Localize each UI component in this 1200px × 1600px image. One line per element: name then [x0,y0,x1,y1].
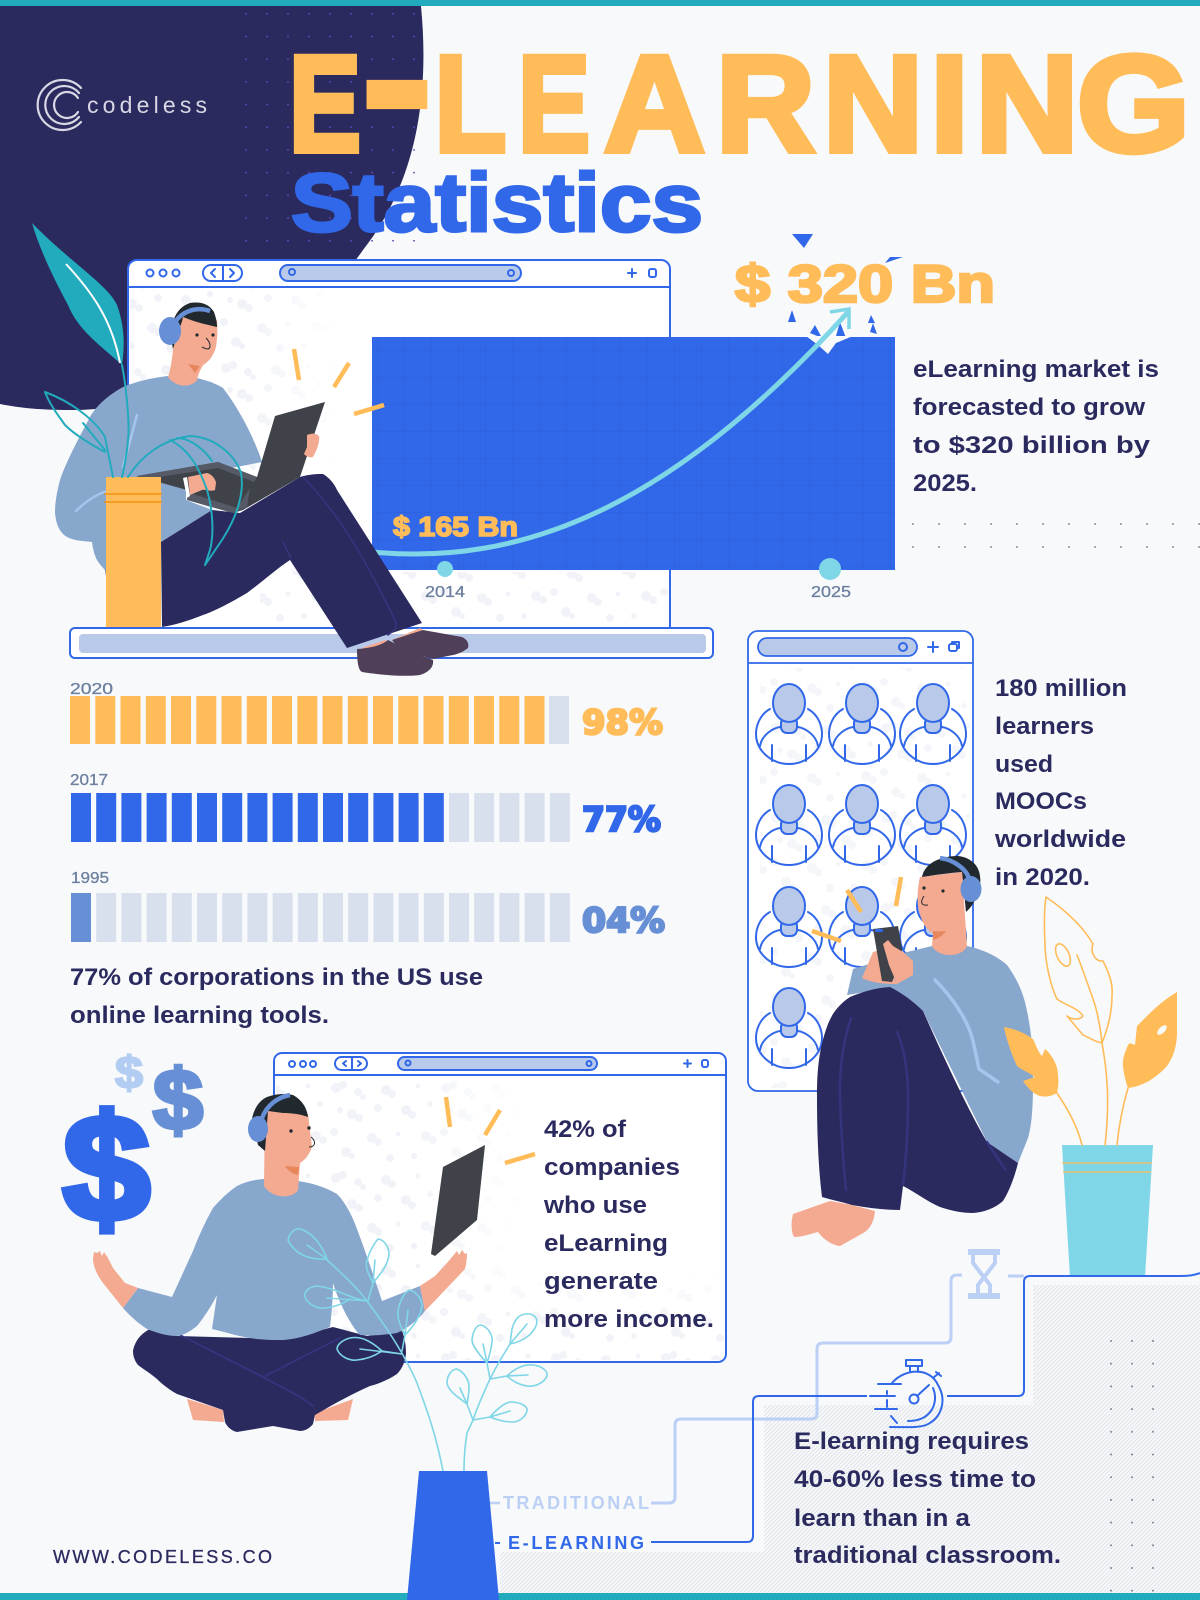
pants seams [840,1018,1005,1190]
plant: orange leaves [1004,897,1177,1145]
bar chart: 2017 [70,772,661,842]
dot pattern in header [245,13,421,245]
tablet [431,1145,485,1256]
hatched floor [500,1285,1200,1594]
shoe right [392,630,468,659]
text: corporations [70,964,483,1029]
text: income [543,1116,714,1333]
neck shadow [933,930,947,940]
line: e-learning path [651,1273,1200,1542]
title: E-LEARNING: R [716,28,815,181]
illustration: floating meditating man [93,1094,485,1432]
pants [133,1327,406,1432]
window texture [760,668,970,1088]
subtitle: Statistics: Statistics [291,156,703,249]
top band [0,0,1200,6]
value 98%: 98% [582,703,663,743]
text: income: 42% of [544,1116,627,1143]
text: corporations: online learning tools. [70,1002,329,1029]
burst lines window 3 [446,1097,535,1163]
window texture lower [260,572,668,628]
2014 marker [437,561,453,577]
window texture [276,1081,460,1358]
headphone [940,858,982,902]
value 165 Bn: $ 165 Bn [393,511,518,542]
shoe left [357,640,433,676]
filled leaf left [1004,1027,1058,1097]
title: E-LEARNING: L [434,28,506,181]
text: corporations: 77% of corporations in the US use [70,964,483,991]
title: E-LEARNING: I [930,28,968,181]
learner icons [756,684,966,1068]
neck shadow [188,364,200,373]
label 2025: 2025 [811,584,851,601]
confetti [788,234,903,338]
bottom band [0,1593,1200,1600]
icon: hourglass [968,1252,1000,1296]
burst lines window 2 [812,877,901,941]
pot: light blue [1062,1145,1153,1277]
logo [38,80,207,130]
label: e-learning: E-LEARNING [508,1533,644,1553]
text: income: companies [544,1154,680,1181]
bar chart: 2020 [70,681,663,744]
burst lines window 1 [294,349,384,414]
growth curve [372,311,849,554]
bars 2020 [70,696,569,744]
value 320 Bn: $ 320 Bn [735,255,995,314]
feet [187,1399,353,1422]
text: market forecast: 2025. [913,470,977,497]
text: income: who use [543,1192,647,1219]
panel: income window [274,1053,726,1362]
window header [748,638,973,663]
logo mark [38,80,81,130]
title: E-LEARNING: E [518,28,590,181]
text: learners: MOOCs [995,788,1087,815]
text: market forecast: forecasted to grow [913,394,1145,421]
value 77%: 77% [582,800,661,840]
headphone [159,309,210,345]
text: learners: in 2020. [995,864,1090,891]
footer url: WWW.CODELESS.CO [53,1547,272,1567]
plant stems: teal [45,365,242,565]
dollar sign small: $ [115,1047,143,1098]
dotted rows [912,523,1200,548]
year label 2017: 2017 [70,772,108,789]
text: time saved: E-learning requires [794,1428,1029,1455]
illustration: man with laptop [55,302,468,676]
icon: stopwatch [870,1360,942,1427]
title: E-LEARNING: G [1077,28,1190,181]
hair [171,302,217,349]
sweater [847,946,1033,1163]
sweater seam [935,980,998,1082]
title: E-LEARNING: N [976,28,1078,181]
laptop base bar [70,628,713,658]
bars 1995 [71,893,570,942]
face details [195,333,215,349]
leaf hole right [1156,1024,1168,1036]
bars 2017 [71,793,570,842]
label 2014: 2014 [425,584,465,601]
outlined leaf [1044,897,1112,1043]
laptop key strip [137,462,257,513]
arrow head [830,309,849,329]
dotted field [1110,1340,1170,1594]
dollar sign medium: $ [153,1053,203,1148]
pants seams [283,477,396,635]
headphone [248,1095,290,1142]
text: income: more income. [544,1306,714,1333]
text: learners [994,675,1127,891]
vase: blue [407,1471,499,1600]
logo wordmark: codeless [87,92,207,118]
laptop [137,402,325,513]
leaf stems [1057,1088,1128,1145]
text: income: generate [544,1268,658,1295]
plant: cyan branches [288,1229,547,1471]
browser window [128,260,670,635]
hand right [420,1250,467,1311]
text: time saved: learn than in a [794,1505,971,1532]
illustration: woman with phone [792,856,1033,1246]
pot: orange [104,477,162,627]
hand right [304,434,319,457]
pants seams [180,1335,340,1406]
ankles [362,628,425,652]
foot [792,1201,875,1246]
window frame [274,1053,726,1362]
neck and face [168,312,217,386]
hand left [188,473,216,495]
hand [883,940,913,984]
text: learners: 180 million [995,675,1127,702]
chart: market growth [372,309,895,601]
phone [873,926,903,982]
phone hand back [862,950,897,984]
hair [922,856,980,912]
text: learners: used [995,751,1053,778]
line: traditional path [651,1275,1024,1503]
phone light [875,929,883,932]
leaf vein and stem [1077,955,1108,1145]
title: E-LEARNING: A [604,28,705,181]
window frame [748,631,973,1091]
year label 2020: 2020 [70,681,113,698]
filled leaf right [1123,992,1177,1088]
chart notch [806,336,853,354]
face details [922,886,945,905]
text: income: eLearning [544,1230,668,1257]
title: E-LEARNING: - [368,7,426,160]
text: market forecast [913,356,1159,497]
panel: learners window [748,631,973,1091]
bar chart: 1995 [71,870,665,942]
year label 1995: 1995 [71,870,109,887]
chart background [372,337,895,570]
sweater [123,1179,425,1340]
browser header [128,265,670,287]
value 04%: 04% [582,901,665,941]
hair [252,1094,308,1151]
window texture [130,289,284,570]
face details [289,1126,315,1147]
dark header blob [0,6,423,410]
pants [161,474,422,648]
cuff [183,477,190,498]
dollar sign large: $ [63,1084,150,1252]
2025 marker [819,558,841,580]
neck and face [264,1108,312,1196]
text: market forecast: eLearning market is [913,356,1159,383]
title: E-LEARNING: E [289,28,361,181]
sweater highlights [76,415,137,511]
hand left [93,1251,138,1308]
text: learners: learners [995,713,1094,740]
text: time saved: traditional classroom. [794,1542,1061,1569]
text: market forecast: to $320 billion by [913,432,1151,459]
leaf hole [1052,942,1074,968]
label: traditional: TRADITIONAL [503,1493,649,1513]
icon: teal leaf [32,223,124,365]
pants [817,987,1018,1213]
chart grid [372,337,895,570]
text: learners: worldwide [994,826,1126,853]
title: E-LEARNING: N [823,28,923,181]
left rear shadow [105,565,120,600]
panel: market growth window [128,260,670,635]
sweater [55,376,262,570]
neck shadow [285,1166,299,1175]
text: time saved [794,1428,1061,1569]
text: time saved: 40-60% less time to [794,1466,1036,1493]
neck and face [918,872,967,955]
window header [274,1057,726,1075]
window texture lower [482,1308,724,1360]
